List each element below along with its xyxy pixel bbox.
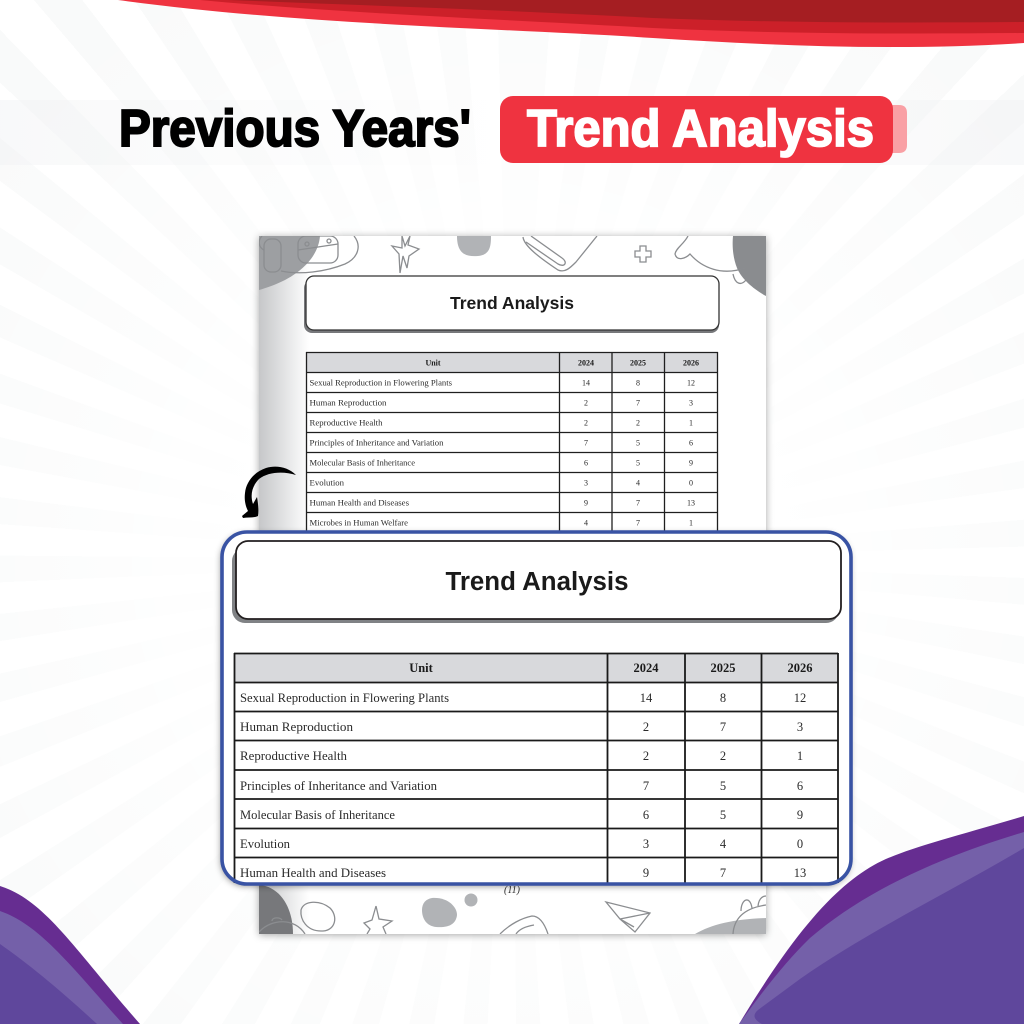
top red swoosh (118, 0, 1024, 47)
table text: 14 (582, 378, 590, 388)
table text: Microbes in Human Welfare (310, 518, 408, 528)
zoom table (234, 653, 838, 883)
background: heading band (0, 100, 1024, 165)
page heading text: Trend Analysis (450, 293, 574, 313)
zoom table text: 7 (720, 866, 726, 880)
zoom table text: Sexual Reproduction in Flowering Plants (240, 691, 449, 705)
table text: 7 (636, 398, 640, 408)
table text: 4 (636, 478, 640, 488)
zoom table text: 6 (643, 808, 649, 822)
table text: Human Reproduction (310, 398, 386, 408)
zoom table text: 4 (720, 837, 727, 851)
table text: Reproductive Health (310, 418, 382, 428)
table text: Sexual Reproduction in Flowering Plants (310, 378, 452, 388)
page number: (11) (504, 885, 521, 896)
doodle outlines (259, 236, 766, 934)
table text: 1 (689, 418, 693, 428)
zoom table text: 2 (720, 749, 726, 763)
zoom table text: Evolution (240, 837, 291, 851)
zoom table text (240, 661, 812, 880)
zoom panel frame (222, 532, 851, 884)
table text: 2 (584, 398, 588, 408)
table text: 9 (689, 458, 693, 468)
page sheet (259, 236, 766, 934)
heading: trend analysis: Trend Analysis (527, 100, 874, 158)
zoom table text: 14 (640, 691, 653, 705)
table text: 6 (689, 438, 693, 448)
zoom table text: 9 (797, 808, 803, 822)
table text: Unit (425, 358, 441, 368)
zoom table text: Reproductive Health (240, 749, 348, 763)
zoom table text: Molecular Basis of Inheritance (240, 808, 395, 822)
zoom table text: 3 (643, 837, 649, 851)
zoom table text: Human Health and Diseases (240, 866, 386, 880)
zoom table text: 2024 (634, 661, 659, 675)
zoom table grid (234, 653, 838, 883)
zoom table text: Unit (409, 661, 434, 675)
zoom heading text: Trend Analysis (446, 568, 628, 596)
table text: 5 (636, 438, 640, 448)
table text: 13 (687, 498, 695, 508)
table text: Molecular Basis of Inheritance (310, 458, 415, 468)
table text: 0 (689, 478, 693, 488)
zoom table text: Principles of Inheritance and Variation (240, 779, 438, 793)
zoom table text: 6 (797, 779, 803, 793)
table text: 8 (636, 378, 640, 388)
table text: 7 (584, 438, 588, 448)
table text: 2026 (683, 358, 699, 368)
heading badge tab (885, 105, 907, 153)
zoom table text: 7 (720, 720, 726, 734)
table text: 2 (636, 418, 640, 428)
table text: 5 (636, 458, 640, 468)
table text: 9 (584, 498, 588, 508)
table text: 2 (584, 418, 588, 428)
table text: Evolution (310, 478, 344, 488)
table text: 12 (687, 378, 695, 388)
table text: 3 (689, 398, 693, 408)
heading badge (500, 96, 893, 163)
heading: previous years: Previous Years' (119, 100, 471, 158)
table text: 2025 (630, 358, 646, 368)
table text: Principles of Inheritance and Variation (310, 438, 444, 448)
doodle blobs (259, 236, 766, 934)
table text: 2024 (578, 358, 594, 368)
zoom table text: 5 (720, 808, 726, 822)
table text: 4 (584, 518, 588, 528)
page table (306, 352, 718, 532)
panel: book page (259, 236, 766, 934)
table text: Human Health and Diseases (310, 498, 409, 508)
panel: zoomed table (222, 532, 851, 884)
heading (119, 96, 907, 163)
table grid (306, 352, 718, 532)
zoom table text: 2026 (788, 661, 812, 675)
zoom heading box (232, 541, 841, 623)
zoom table text: 12 (794, 691, 806, 705)
zoom table text: 0 (797, 837, 803, 851)
zoom table text: 8 (720, 691, 726, 705)
page doodles (259, 236, 766, 934)
zoom table text: 1 (797, 749, 803, 763)
table text: 7 (636, 518, 640, 528)
zoom table header fill (234, 653, 838, 682)
table text (310, 358, 699, 528)
table text: 7 (636, 498, 640, 508)
zoom table text: 5 (720, 779, 726, 793)
zoom table text: 13 (794, 866, 806, 880)
page spine shading (259, 236, 309, 934)
bottom-right purple wave (739, 816, 1024, 1024)
bottom-left purple wave (0, 886, 140, 1024)
zoom table text: 2025 (710, 661, 736, 675)
zoom table text: Human Reproduction (240, 720, 354, 734)
table text: 6 (584, 458, 588, 468)
zoom table text: 3 (797, 720, 803, 734)
zoom table text: 9 (643, 866, 649, 880)
zoom table text: 7 (643, 779, 649, 793)
table text: 1 (689, 518, 693, 528)
zoom panel blue border (222, 532, 851, 884)
page heading box (304, 276, 719, 333)
zoom table text: 2 (643, 749, 649, 763)
table text: 3 (584, 478, 588, 488)
arrow (242, 467, 296, 518)
table header fill (306, 352, 718, 372)
zoom table text: 2 (643, 720, 649, 734)
